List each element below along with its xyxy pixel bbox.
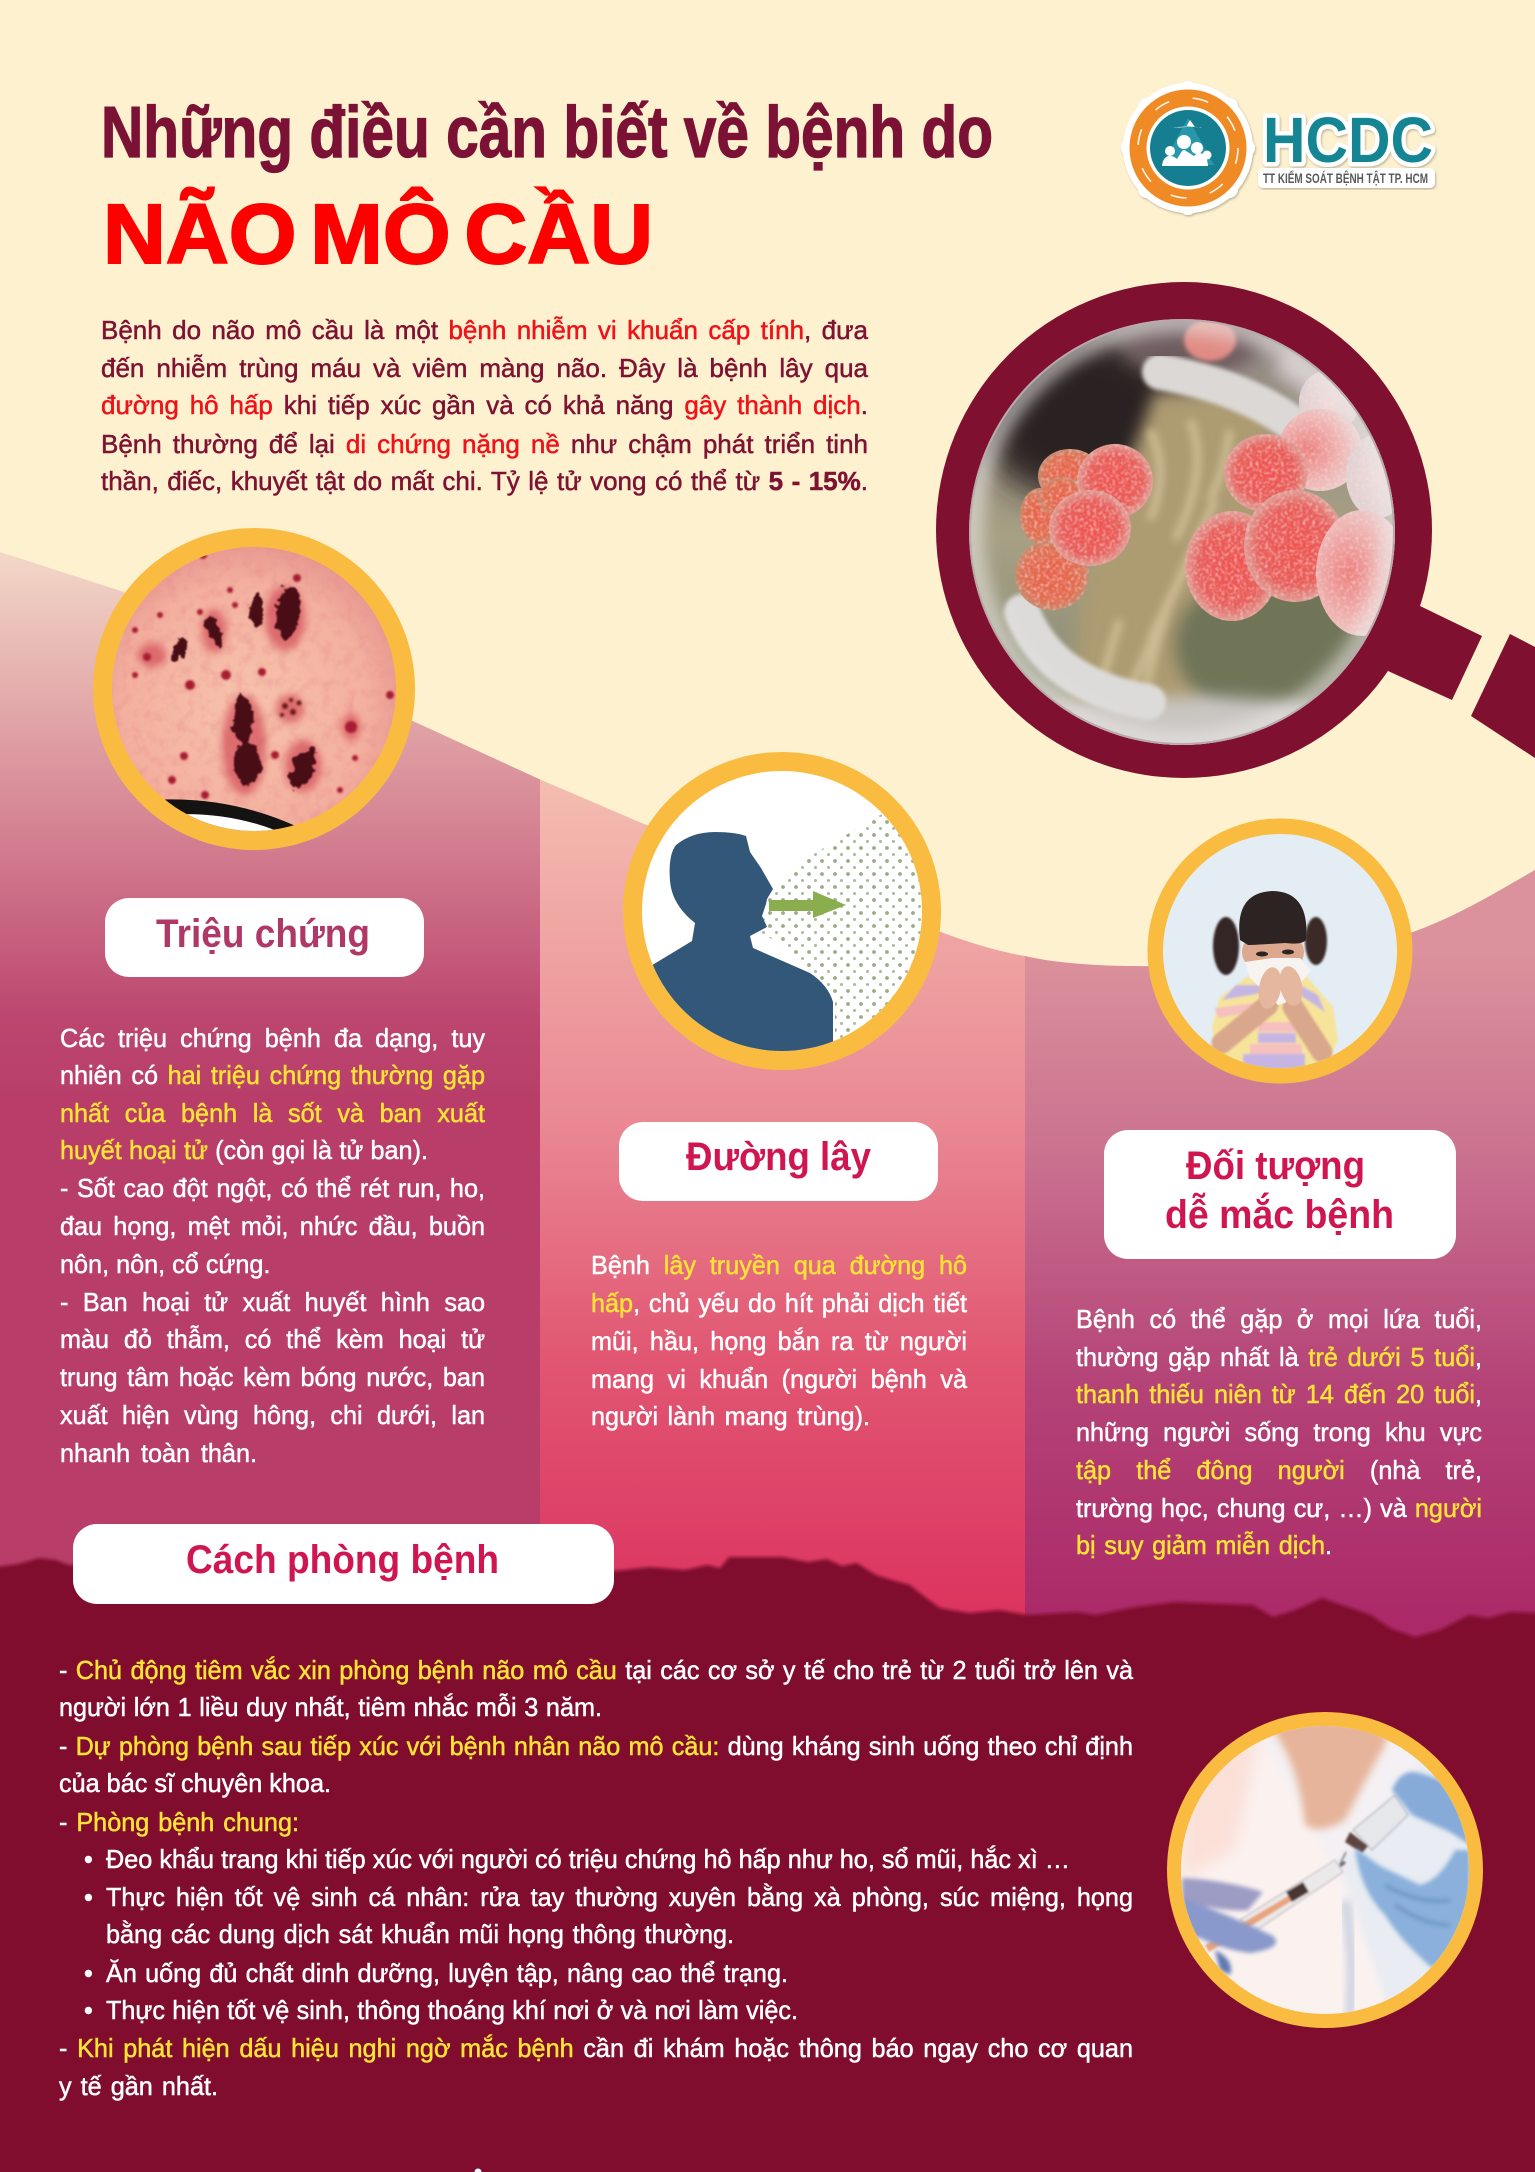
silhouette [652, 832, 833, 1051]
heading: Đường lây: Đường lây [686, 1135, 872, 1179]
text: Đường lây body: người lành mang trùng). [591, 1401, 870, 1431]
text: Triệu chứng body: đau họng, mệt mỏi, nhức đầu, buồn [60, 1211, 485, 1241]
text: Cách phòng bệnh body: - Phòng bệnh chung: [59, 1807, 299, 1837]
heading: Đường lây [619, 1122, 938, 1201]
text: Đối tượng body: thường gặp nhất là trẻ dưới 5 tuổi, [1076, 1342, 1482, 1372]
text: Đường lây body [591, 1250, 968, 1431]
logo: HCDC [1121, 81, 1438, 218]
text: Triệu chứng body: trung tâm hoặc kèm bóng nước, ban [60, 1362, 485, 1392]
icon: magnifier with bacteria [936, 282, 1535, 778]
text: Triệu chứng body: màu đỏ thẫm, có thể kèm hoại tử [60, 1324, 485, 1354]
title [101, 93, 993, 281]
magnifier handle [1388, 606, 1535, 758]
text: Đường lây body: mang vi khuẩn (người bệnh và [591, 1364, 967, 1394]
heading: Triệu chứng: Triệu chứng [156, 912, 370, 956]
text: Đối tượng body: những người sống trong khu vực [1076, 1417, 1482, 1447]
face [1242, 942, 1304, 962]
text: Triệu chứng body: Các triệu chứng bệnh đa dạng, tuy [60, 1023, 485, 1053]
text: Đường lây body: hấp, chủ yếu do hít phải dịch tiết [591, 1288, 967, 1318]
text: Cách phòng bệnh body: Ăn uống đủ chất dinh dưỡng, luyện tập, nâng cao thể trạng. [106, 1958, 788, 1988]
left glove [1182, 1878, 1276, 1975]
text: Cách phòng bệnh body: • [84, 1844, 93, 1874]
text: Cách phòng bệnh body: người lớn 1 liều duy nhất, tiêm nhắc mỗi 3 năm. [59, 1692, 602, 1722]
intro text block: đến nhiễm trùng máu và viêm màng não. Đây là bệnh lây qua [101, 353, 868, 383]
text: Cách phòng bệnh body: Đeo khẩu trang khi tiếp xúc với người có triệu chứng hô hấp như ho, sổ mũi, hắc xì … [106, 1844, 1070, 1874]
text: Cách phòng bệnh body: bằng các dung dịch sát khuẩn mũi họng thông thường. [106, 1919, 734, 1949]
text: Triệu chứng body: nhất của bệnh là sốt và ban xuất [60, 1098, 485, 1128]
intro text block: đường hô hấp khi tiếp xúc gần và có khả năng gây thành dịch. [101, 390, 868, 420]
title: NÃO MÔ CẦU [103, 187, 653, 281]
heading: Cách phòng bệnh: Cách phòng bệnh [186, 1538, 499, 1582]
heading: Đối tượng dễ mắc bệnh [1104, 1130, 1456, 1259]
text: Cách phòng bệnh body: Thực hiện tốt vệ sinh, thông thoáng khí nơi ở và nơi làm việc. [106, 1995, 798, 2025]
text: Đường lây body: Bệnh lây truyền qua đường hô [591, 1250, 967, 1280]
hands [1258, 967, 1281, 1009]
text: Đối tượng body: tập thể đông người (nhà trẻ, [1076, 1455, 1482, 1485]
lens: bacteria photo [969, 319, 1395, 745]
bacteria: right cluster [1185, 370, 1410, 636]
text: Đường lây body: mũi, hầu, họng bắn ra từ người [591, 1326, 967, 1356]
text: Cách phòng bệnh body: - Dự phòng bệnh sau tiếp xúc với bệnh nhân não mô cầu: dùng kháng sinh uống theo chỉ định [59, 1731, 1133, 1761]
vial [1345, 1795, 1408, 1853]
droplets [762, 814, 921, 1038]
text: Triệu chứng body: - Ban hoại tử xuất huyết hình sao [60, 1287, 485, 1317]
text: Triệu chứng body: nhiên có hai triệu chứng thường gặp [60, 1060, 485, 1090]
heading: Đối tượng dễ mắc bệnh: dễ mắc bệnh [1165, 1191, 1394, 1237]
text: Cách phòng bệnh body: • [84, 1958, 93, 1988]
heading: Đối tượng dễ mắc bệnh: Đối tượng [1186, 1144, 1365, 1188]
text: Cách phòng bệnh body: của bác sĩ chuyên khoa. [59, 1768, 331, 1798]
photo: breathing silhouette circle [623, 752, 941, 1070]
text: Triệu chứng body: nhanh toàn thân. [60, 1438, 257, 1468]
text: Triệu chứng body: huyết hoại tử (còn gọi là tử ban). [60, 1135, 428, 1165]
arrow [769, 891, 846, 918]
right glove [1355, 1772, 1470, 1968]
text: Triệu chứng body: - Sốt cao đột ngột, có thể rét run, ho, [60, 1173, 485, 1203]
text: Cách phòng bệnh body: - Chủ động tiêm vắc xin phòng bệnh não mô cầu tại các cơ sở y tế cho trẻ từ 2 tuổi trở lên và [59, 1655, 1133, 1685]
intro text block: Bệnh do não mô cầu là một bệnh nhiễm vi khuẩn cấp tính, đưa [101, 315, 868, 345]
heading: Cách phòng bệnh [73, 1524, 614, 1604]
intro text block [101, 315, 868, 496]
text: Cách phòng bệnh body: y tế gần nhất. [59, 2071, 218, 2101]
intro text block: Bệnh thường để lại di chứng nặng nề như chậm phát triển tinh [101, 429, 868, 459]
magnifier frame [936, 282, 1432, 778]
photo: vaccine injection circle [1167, 1712, 1483, 2028]
arms [1222, 1005, 1322, 1052]
text: Cách phòng bệnh body: - Khi phát hiện dấu hiệu nghi ngờ mắc bệnh cần đi khám hoặc thông báo ngay cho cơ quan [59, 2033, 1133, 2063]
heading: Triệu chứng [105, 898, 424, 977]
logo: HCDC: HCDC [1263, 104, 1433, 176]
neck [1268, 1720, 1392, 1829]
text: Cách phòng bệnh body: • [84, 1995, 93, 2025]
text: Đối tượng body [1076, 1304, 1482, 1560]
tissue [1245, 958, 1311, 1005]
photo: child with tissue circle [1148, 818, 1412, 1084]
pigtails [1213, 917, 1239, 975]
bacteria: left cluster [1015, 444, 1153, 610]
text: Cách phòng bệnh body: Thực hiện tốt vệ sinh cá nhân: rửa tay thường xuyên bằng xà phòng, súc miệng, họng [106, 1882, 1133, 1912]
text: Cách phòng bệnh body [58, 1655, 1134, 2101]
hair [1239, 891, 1306, 945]
intro text block: thần, điếc, khuyết tật do mất chi. Tỷ lệ tử vong có thể từ 5 - 15%. [101, 466, 868, 496]
shirt [1212, 977, 1338, 1070]
text: Đối tượng body: bị suy giảm miễn dịch. [1076, 1530, 1332, 1560]
text: Triệu chứng body [60, 1023, 486, 1468]
text: Đối tượng body: thanh thiếu niên từ 14 đến 20 tuổi, [1076, 1379, 1482, 1409]
photo: rash circle [93, 528, 415, 850]
text: Triệu chứng body: xuất hiện vùng hông, chi dưới, lan [60, 1400, 485, 1430]
syringe [1205, 1852, 1346, 1952]
text: Đối tượng body: trường học, chung cư, …) và người [1076, 1493, 1482, 1523]
text: Cách phòng bệnh body: • [84, 1882, 93, 1912]
text: Đối tượng body: Bệnh có thể gặp ở mọi lứa tuổi, [1076, 1304, 1482, 1334]
text: Triệu chứng body: nôn, nôn, cổ cứng. [60, 1249, 270, 1279]
